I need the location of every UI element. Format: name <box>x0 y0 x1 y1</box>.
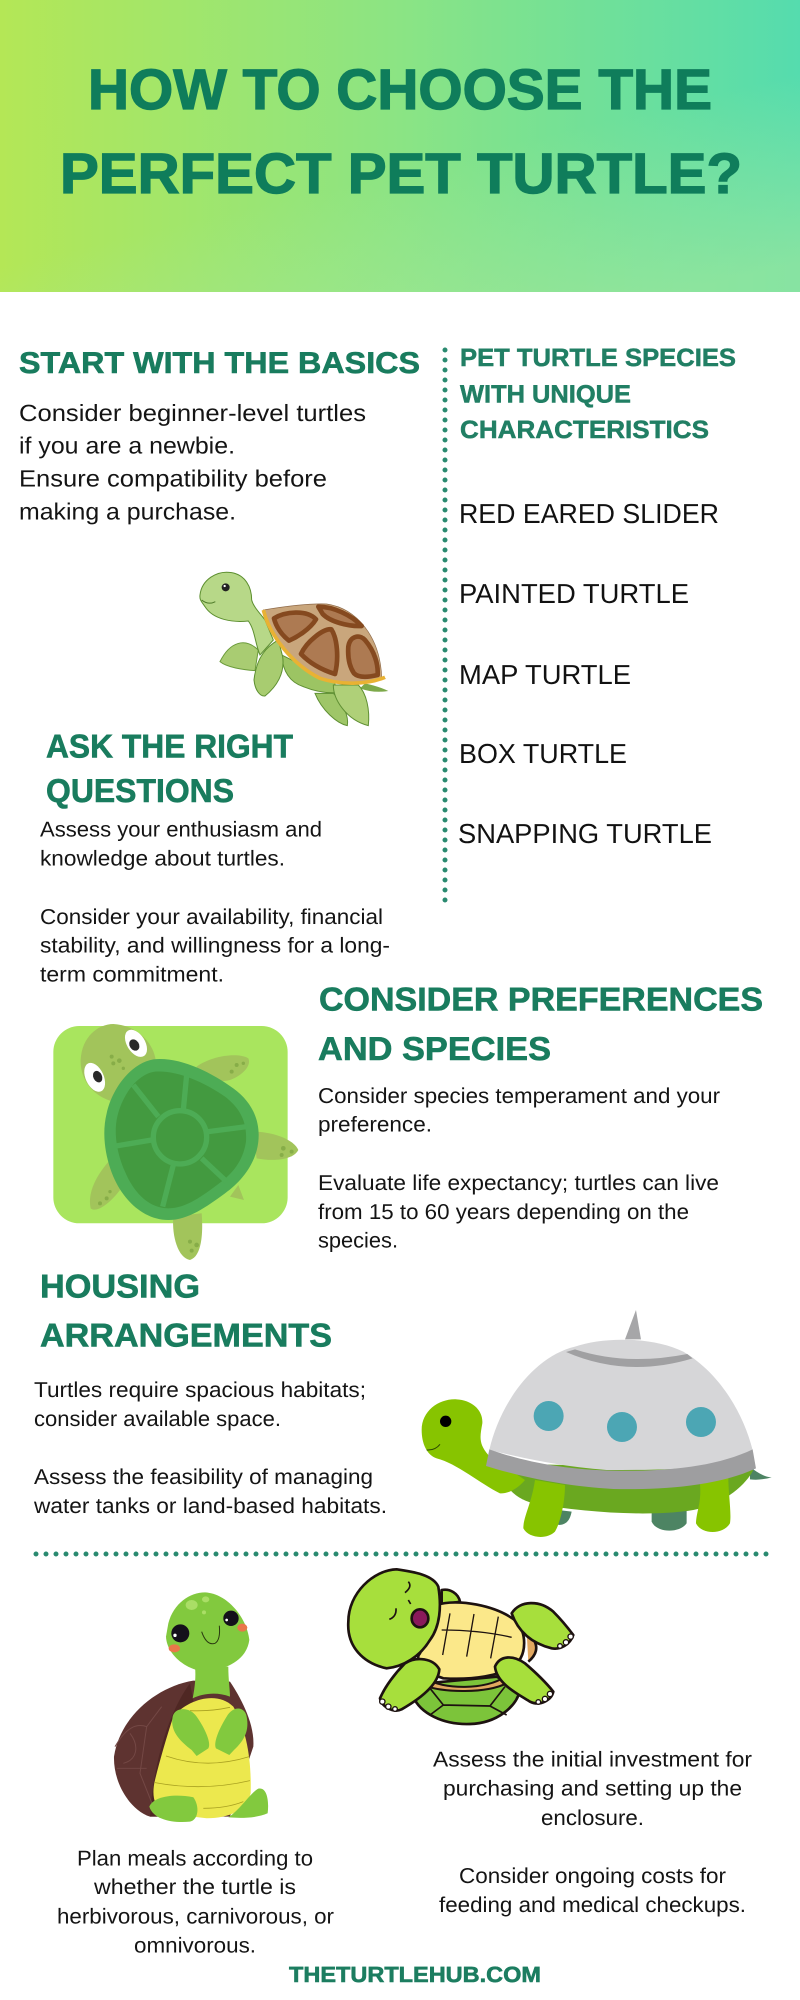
text block: questions: stability, and willingness for a long- <box>40 934 390 958</box>
text block: costs <box>433 1748 752 1917</box>
icon: top-view turtle on green tile <box>53 1024 298 1260</box>
heading: consider preferences and species <box>318 980 763 1067</box>
text block: housing: Turtles require spacious habitats; <box>34 1378 366 1402</box>
text block: questions <box>40 818 390 986</box>
text block: meals <box>57 1846 334 1958</box>
text block: housing: consider available space. <box>34 1407 281 1431</box>
heading: pet turtle species <box>460 344 736 444</box>
panel: pet turtle species <box>458 344 736 849</box>
text block: costs: purchasing and setting up the <box>443 1776 742 1800</box>
text block: meals: omnivorous. <box>134 1934 256 1958</box>
heading: housing arrangements: HOUSING <box>40 1268 200 1304</box>
text block: housing: Assess the feasibility of managing <box>34 1465 373 1489</box>
text block: costs: Assess the initial investment for <box>433 1748 752 1772</box>
heading: ask the right questions: ASK THE RIGHT <box>46 728 293 764</box>
heading: pet turtle species: CHARACTERISTICS <box>460 416 709 444</box>
heading: pet turtle species: WITH UNIQUE <box>460 380 631 408</box>
text block: basics: Consider beginner-level turtles <box>19 400 366 426</box>
text block: housing <box>33 1378 387 1518</box>
text block: meals: whether the turtle is <box>93 1875 296 1899</box>
title: PERFECT PET TURTLE? <box>60 142 742 206</box>
text block: basics: if you are a newbie. <box>19 432 235 458</box>
text block: basics <box>19 400 366 524</box>
text block: preferences: preference. <box>318 1112 432 1136</box>
text block: preferences: Evaluate life expectancy; turtles can live <box>318 1171 719 1195</box>
text block: costs: feeding and medical checkups. <box>439 1893 746 1917</box>
species list: BOX TURTLE <box>459 738 627 769</box>
text block: questions: Assess your enthusiasm and <box>40 818 322 842</box>
heading: pet turtle species: PET TURTLE SPECIES <box>460 344 736 372</box>
text block: preferences: from 15 to 60 years depending on the <box>318 1200 689 1224</box>
text block: preferences: Consider species temperament and your <box>318 1084 720 1108</box>
panel: consider preferences and species <box>318 980 763 1252</box>
text block: meals: Plan meals according to <box>77 1846 313 1870</box>
panel: ask the right questions <box>40 728 390 986</box>
icon: watercolor turtle <box>200 572 388 726</box>
heading: consider preferences and species: AND SPECIES <box>318 1030 551 1067</box>
species list: MAP TURTLE <box>459 659 631 690</box>
text block: questions: term commitment. <box>40 962 224 986</box>
species list: RED EARED SLIDER <box>459 498 719 529</box>
header banner <box>0 0 800 292</box>
panel: start with the basics <box>19 347 420 524</box>
heading: consider preferences and species: CONSIDER PREFERENCES <box>319 980 763 1018</box>
title <box>60 58 742 206</box>
species list <box>458 498 719 849</box>
text block: basics: Ensure compatibility before <box>19 466 327 492</box>
footer: website: THETURTLEHUB.COM <box>289 1962 541 1987</box>
species list: SNAPPING TURTLE <box>458 818 712 849</box>
icon: turtle lying on its back <box>348 1569 573 1724</box>
text block: basics: making a purchase. <box>19 498 236 524</box>
text block: preferences: species. <box>318 1228 398 1252</box>
heading: start with the basics: START WITH THE BASICS <box>19 347 420 380</box>
title: HOW TO CHOOSE THE <box>88 58 712 122</box>
text block: questions: Consider your availability, financial <box>40 905 383 929</box>
heading: ask the right questions: QUESTIONS <box>46 772 234 809</box>
text block: meals: herbivorous, carnivorous, or <box>57 1904 334 1928</box>
icon: turtle with grey dome shell <box>422 1310 772 1537</box>
text block: costs: enclosure. <box>541 1806 644 1830</box>
text block: costs: Consider ongoing costs for <box>459 1864 726 1888</box>
panel: housing arrangements <box>33 1268 387 1518</box>
heading: housing arrangements: ARRANGEMENTS <box>40 1316 332 1354</box>
heading: ask the right questions <box>46 728 293 809</box>
text block: questions: knowledge about turtles. <box>40 846 285 870</box>
text block: preferences <box>318 1084 720 1252</box>
icon: sitting baby turtle <box>114 1592 268 1822</box>
heading: housing arrangements <box>40 1268 332 1354</box>
text block: housing: water tanks or land-based habitats. <box>33 1494 387 1518</box>
species list: PAINTED TURTLE <box>459 578 689 609</box>
